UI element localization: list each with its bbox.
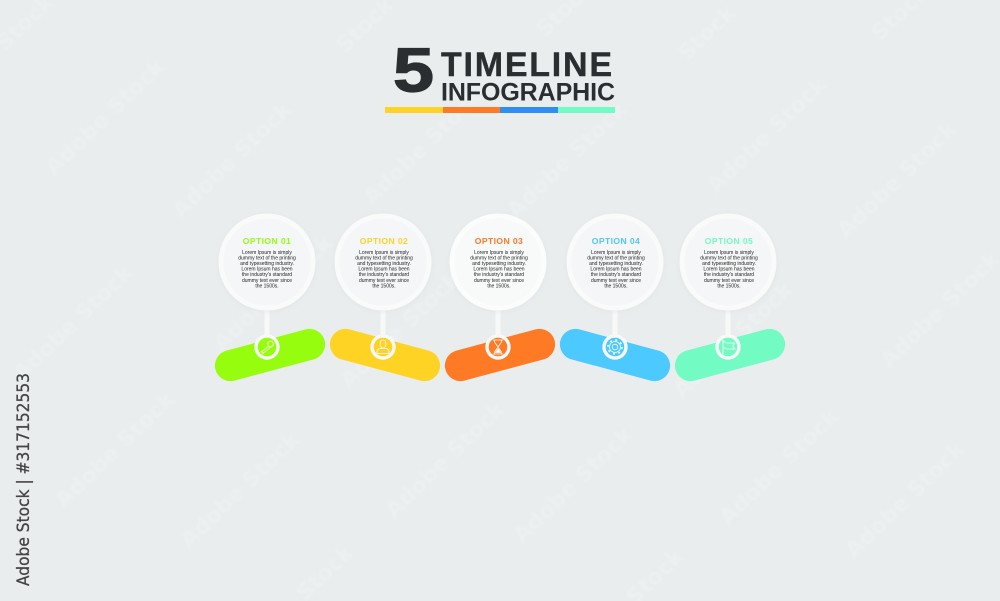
icon: flag <box>715 334 741 360</box>
watermark pattern: Adobe Stock <box>41 53 171 180</box>
body text: Lorem Ipsum has been <box>473 267 525 273</box>
body text: dummy text of the printing <box>355 255 413 261</box>
body text: Lorem Ipsum is simply <box>474 250 524 256</box>
circle card <box>450 214 546 311</box>
body text: and typesetting industry. <box>702 261 756 267</box>
watermark pattern: Adobe Stock <box>176 426 306 553</box>
watermark pattern: Adobe Stock <box>503 96 633 223</box>
green pill <box>230 344 310 366</box>
icon: hourglass <box>485 334 511 360</box>
watermark pattern: Adobe Stock <box>381 396 511 523</box>
heading: OPTION 04 <box>592 236 640 246</box>
body text: dummy text ever since <box>359 278 409 284</box>
heading: OPTION 01 <box>243 236 291 246</box>
watermark pattern: Adobe Stock <box>669 276 799 403</box>
watermark pattern: Adobe Stock <box>9 259 139 386</box>
title <box>393 36 615 106</box>
circle card <box>218 214 316 311</box>
circle card <box>566 214 664 311</box>
body text: dummy text ever since <box>591 278 641 284</box>
circle card <box>680 214 776 311</box>
watermark pattern: Adobe Stock <box>51 386 181 513</box>
body text: dummy text ever since <box>474 278 524 284</box>
stem <box>726 305 730 337</box>
body text: dummy text of the printing <box>700 255 758 261</box>
icon: gear <box>602 334 628 360</box>
body text: dummy text ever since <box>242 278 292 284</box>
stock id side label: Adobe Stock | #317152553 <box>14 373 34 586</box>
watermark pattern: Adobe Stock <box>703 71 833 198</box>
stem <box>380 305 386 337</box>
body text: dummy text ever since <box>704 278 754 284</box>
body text: Lorem Ipsum is simply <box>242 250 292 256</box>
watermark pattern: Adobe Stock <box>841 436 971 563</box>
mint pill <box>690 344 770 366</box>
body text: and typesetting industry. <box>240 261 294 267</box>
orange pill <box>460 344 540 366</box>
body text: dummy text of the printing <box>587 255 645 261</box>
watermark pattern: Adobe Stock <box>359 83 489 210</box>
title colour bar <box>385 107 615 113</box>
option 02 <box>334 214 432 366</box>
body text: the 1500s. <box>604 283 628 289</box>
body text: dummy text of the printing <box>470 255 528 261</box>
body text: the 1500s. <box>255 283 279 289</box>
body text: Lorem Ipsum has been <box>590 267 642 273</box>
icon: key <box>254 334 280 360</box>
body text: Lorem Ipsum has been <box>703 267 755 273</box>
body text: dummy text of the printing <box>238 255 296 261</box>
watermark pattern: Stock <box>674 0 742 66</box>
body text: and typesetting industry. <box>589 261 643 267</box>
watermark pattern: Adobe Stock <box>336 266 466 393</box>
body text: and typesetting industry. <box>357 261 411 267</box>
watermark pattern: Adobe Stock <box>833 116 963 243</box>
stem <box>496 305 500 337</box>
title: 5 <box>393 36 434 106</box>
icon: person <box>370 334 396 360</box>
stem <box>612 305 618 337</box>
yellow pill <box>345 344 425 366</box>
option 03 <box>450 214 546 366</box>
option 04 <box>566 214 664 366</box>
body text: Lorem Ipsum has been <box>358 267 410 273</box>
option 05 <box>680 214 776 366</box>
circle card <box>334 214 432 311</box>
body text: the industry's standard <box>704 272 754 278</box>
watermark pattern: Adobe Stock <box>715 403 845 530</box>
heading: OPTION 02 <box>360 236 408 246</box>
heading: OPTION 05 <box>705 236 753 246</box>
stem <box>264 305 270 337</box>
body text: the industry's standard <box>474 272 524 278</box>
heading: OPTION 03 <box>475 236 523 246</box>
title: TIMELINE <box>441 46 613 84</box>
title: INFOGRAPHIC <box>441 78 615 106</box>
body text: Lorem Ipsum is simply <box>591 250 641 256</box>
body text: the industry's standard <box>242 272 292 278</box>
body text: the 1500s. <box>487 283 511 289</box>
watermark pattern: Adobe Stock <box>509 421 639 548</box>
body text: Lorem Ipsum has been <box>241 267 293 273</box>
body text: Lorem Ipsum is simply <box>704 250 754 256</box>
body text: the 1500s. <box>372 283 396 289</box>
blue pill <box>575 344 655 366</box>
body text: Lorem Ipsum is simply <box>359 250 409 256</box>
watermark pattern: Adobe Stock <box>168 96 298 223</box>
option 01 <box>218 214 316 366</box>
body text: the industry's standard <box>359 272 409 278</box>
body text: the 1500s. <box>717 283 741 289</box>
watermark pattern: Adobe Stock <box>209 229 339 356</box>
body text: and typesetting industry. <box>472 261 526 267</box>
body text: the industry's standard <box>591 272 641 278</box>
